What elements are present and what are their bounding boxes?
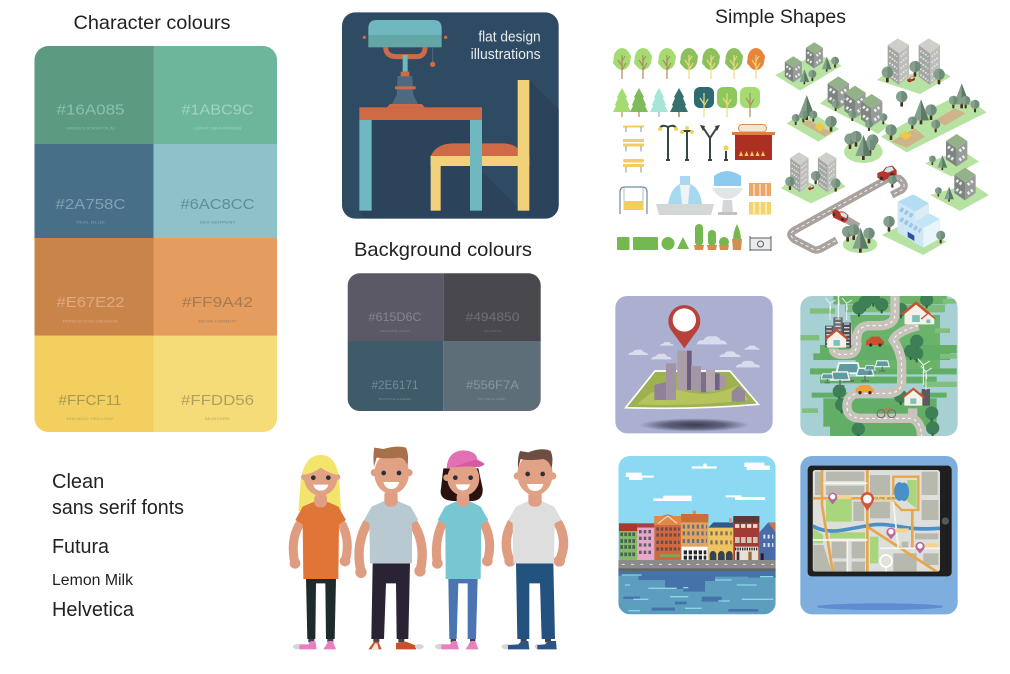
swatch: #FF9A42: #FF9A42 [182, 294, 253, 311]
street lamps [658, 125, 729, 160]
bird bath [712, 171, 743, 215]
swatch: #6AC8CC [154, 144, 278, 238]
map screen [813, 470, 940, 572]
swatch: #494850: #494850 [466, 312, 520, 324]
swatch: #615D6C: GRANITE GRAY [380, 329, 410, 333]
swatch: #16A085: GREEN (CRAYOLA) [66, 126, 116, 130]
swatch: #FFDD56: #FFDD56 [181, 392, 254, 409]
kiosk [732, 124, 775, 160]
shadow [639, 418, 749, 432]
text: Helvetica: Helvetica [52, 599, 135, 621]
desk lamp [363, 20, 447, 107]
heading: Background colours: Background colours [354, 239, 532, 261]
swatch: #2A758C [34, 144, 154, 238]
text block: font guidance [52, 471, 184, 621]
swatch: #FF9A42 [154, 238, 278, 336]
swatch: #FFCF11 [34, 336, 154, 433]
swatch: #556F7A: #556F7A [466, 380, 519, 392]
swatch: #556F7A: PAYNE'S GREY [478, 397, 507, 401]
swatch: #FFCF11: #FFCF11 [58, 392, 122, 409]
swatch: #E67E22: PRINCETON ORANGE [62, 318, 119, 324]
heading: Simple Shapes: Simple Shapes [715, 6, 846, 28]
text: Clean sans serif fonts: sans serif fonts [52, 497, 184, 519]
swatch: #6AC8CC: SEA SERPENT [200, 220, 236, 224]
text: Futura: Futura [52, 536, 110, 558]
vehicles [856, 337, 896, 418]
wind turbines [825, 290, 932, 390]
skyscrapers [654, 351, 745, 402]
panel: character colour palette [34, 46, 278, 433]
water [618, 571, 776, 614]
green land stripes [800, 296, 958, 436]
illustration: four characters [290, 447, 565, 649]
text: Clean sans serif fonts: Clean [52, 471, 104, 493]
caption: flat design illustrations: illustrations [471, 47, 541, 63]
road with cars [791, 166, 904, 250]
swatch: #2A758C: #2A758C [56, 196, 126, 213]
city buildings [825, 317, 930, 406]
swatch: #16A085 [34, 46, 154, 144]
character: woman with pink cap [432, 450, 493, 649]
swatch: #FF9A42: NEON CARROT [198, 318, 237, 324]
swatch: #FFDD56 [154, 336, 278, 433]
character: man with brown hair [355, 447, 426, 649]
swatch: #2A758C: TEAL BLUE [76, 220, 105, 224]
block: two towers [877, 38, 951, 94]
icon sheet: park elements [613, 48, 775, 251]
clouds [628, 336, 760, 367]
tablet body [808, 466, 952, 576]
swatch: #FFCF11: MIKADO YELLOW [67, 416, 113, 421]
swing [620, 187, 647, 214]
swatch: #615D6C: #615D6C [368, 312, 422, 324]
swatch: #615D6C [347, 273, 443, 341]
waterfront buildings [619, 511, 776, 560]
swatch: #E67E22: #E67E22 [56, 294, 124, 311]
trees [833, 291, 939, 438]
character: man in white shirt [502, 449, 565, 649]
shadow [817, 603, 943, 610]
swatch: #494850: QUARTZ [484, 329, 501, 333]
trees row [613, 48, 765, 79]
gate [750, 236, 771, 251]
panel: flat design desk illustration [342, 12, 563, 219]
houses [825, 303, 936, 406]
text: Clean sans serif fonts [52, 471, 184, 519]
block: lower round tree island [842, 224, 877, 253]
location pin [668, 305, 700, 348]
map pins and labels: YOU'RE HERE [872, 496, 897, 500]
panel: harbour townscape illustration [618, 456, 776, 614]
swatch: #6AC8CC: #6AC8CC [180, 196, 255, 213]
fences [749, 183, 771, 214]
block: right green houses [925, 134, 989, 211]
panel: map location illustration [615, 296, 773, 433]
text: Lemon Milk: Lemon Milk [52, 572, 133, 589]
quay road [618, 560, 776, 571]
swatch: #2E6171 [347, 341, 443, 412]
panel: green city map illustration [800, 290, 958, 438]
character: blonde woman in orange shirt [290, 455, 350, 649]
winding roads [833, 292, 922, 438]
illustration: isometric city [775, 38, 989, 255]
swatch: #1ABC9C: #1ABC9C [182, 102, 254, 118]
camera [942, 517, 949, 525]
desk [359, 107, 482, 211]
benches [623, 126, 644, 172]
block: row of houses [820, 76, 889, 134]
lone tree [896, 91, 907, 107]
fountain [656, 176, 714, 215]
folded map [626, 371, 758, 408]
swatch: #556F7A [443, 341, 541, 412]
panel: tablet navigation map illustration [800, 456, 958, 614]
swatch: #16A085: #16A085 [56, 102, 124, 118]
swatch: #2E6171: MYRTLE GREEN [379, 397, 411, 401]
chair [431, 80, 529, 211]
swatch: #FFDD56: MUSTARD [205, 416, 230, 421]
heading: Character colours: Character colours [74, 12, 231, 34]
swatch: #1ABC9C: LIGHT SEA GREEN [194, 126, 241, 130]
caption: flat design illustrations [471, 30, 541, 63]
map pins and labels [828, 492, 938, 554]
block: two green roofed houses [775, 42, 842, 91]
block: blue building [882, 194, 947, 255]
clouds [626, 463, 770, 501]
solar panels [821, 361, 889, 386]
hedges and planters [617, 224, 742, 250]
swatch: #2E6171: #2E6171 [372, 380, 418, 392]
block: small park [787, 95, 839, 142]
conifers and square trees [613, 87, 760, 117]
block: long park [881, 83, 987, 152]
block: round tree island [844, 131, 883, 163]
panel: background colour palette [347, 273, 541, 412]
swatch: #E67E22 [34, 238, 154, 336]
swatch: #494850 [443, 273, 541, 341]
swatch: #1ABC9C [154, 46, 278, 144]
caption: flat design illustrations: flat design [478, 30, 541, 46]
block: lower towers [781, 152, 846, 203]
